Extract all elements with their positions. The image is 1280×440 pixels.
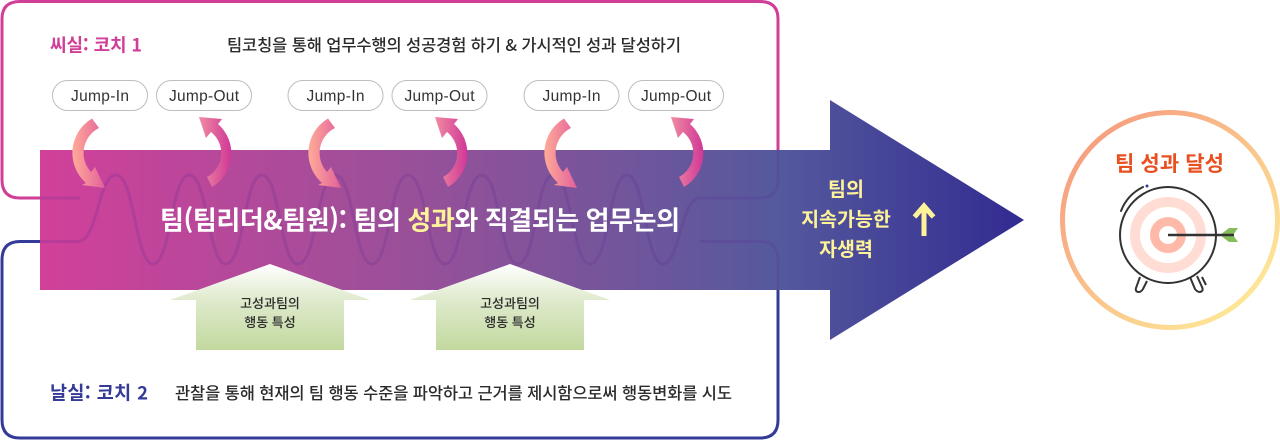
button: Jump-Out 1: Jump-Out bbox=[169, 88, 240, 105]
arrow: jump-out 3 bbox=[671, 117, 703, 187]
up arrow: team behaviour 1 bbox=[170, 264, 370, 350]
arrow: jump-out 1 bbox=[199, 117, 231, 187]
band title: 팀(팀리더&팀원): 팀의 성과와 직결되는 업무논의 bbox=[160, 200, 680, 238]
up arrow: team behaviour 2 bbox=[410, 264, 610, 350]
arrow: jump-in 2 bbox=[308, 118, 341, 188]
arrow: jump-in 1 bbox=[72, 118, 105, 188]
text: sustainable team resilience bbox=[801, 173, 891, 262]
main arrow band bbox=[40, 100, 1024, 340]
button: Jump-In 3: Jump-In bbox=[542, 88, 600, 105]
button: Jump-In 3 bbox=[524, 80, 619, 110]
button: Jump-Out 2 bbox=[392, 80, 487, 110]
arrow: jump-in 3 bbox=[544, 118, 577, 188]
button: Jump-In 1 bbox=[52, 80, 148, 110]
up arrow: team behaviour 2: 행동 특성 bbox=[484, 312, 536, 331]
button: Jump-Out 2: Jump-Out bbox=[404, 88, 475, 105]
panel: team goal circle bbox=[1062, 112, 1278, 328]
button: Jump-In 1: Jump-In bbox=[71, 88, 129, 105]
heading: coach 2: 날실: 코치 2 bbox=[50, 380, 148, 406]
button: Jump-Out 3: Jump-Out bbox=[641, 88, 712, 105]
text: sustainable team resilience: 지속가능한 bbox=[801, 203, 891, 232]
up arrow: team behaviour 1: 행동 특성 bbox=[244, 312, 296, 331]
heading: team goal: 팀 성과 달성 bbox=[1115, 148, 1224, 178]
arrow: jump-out 2 bbox=[435, 117, 467, 187]
button: Jump-In 2: Jump-In bbox=[306, 88, 364, 105]
button: Jump-Out 3 bbox=[628, 80, 724, 110]
heading: coach 1: 씨실: 코치 1 bbox=[50, 32, 142, 58]
woven thread wave bbox=[40, 150, 778, 290]
icon: target bbox=[1120, 184, 1238, 292]
panel: weft coach 1 outline bbox=[2, 2, 778, 198]
text: sustainable team resilience: 자생력 bbox=[819, 233, 873, 262]
icon: up arrow bbox=[914, 206, 934, 236]
up arrow: team behaviour 2: 고성과팀의 bbox=[480, 293, 540, 312]
panel: warp coach 2 outline bbox=[2, 242, 778, 438]
button: Jump-In 2 bbox=[288, 80, 383, 110]
up arrow: team behaviour 1: 고성과팀의 bbox=[240, 293, 300, 312]
text: coach 1 description: 팀코칭을 통해 업무수행의 성공경험 하기 & 가시적인 성과 달성하기 bbox=[227, 32, 681, 56]
button: Jump-Out 1 bbox=[156, 80, 252, 110]
text: coach 2 description: 관찰을 통해 현재의 팀 행동 수준을 파악하고 근거를 제시함으로써 행동변화를 시도 bbox=[175, 380, 732, 404]
text: sustainable team resilience: 팀의 bbox=[828, 173, 864, 202]
